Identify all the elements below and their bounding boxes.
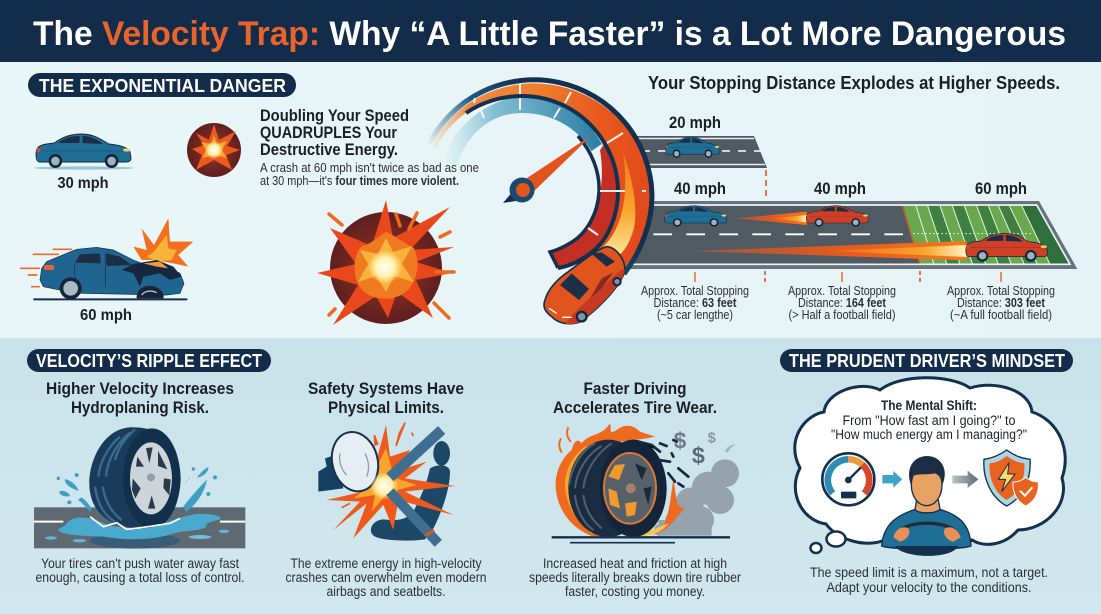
label: 30 mph: 30 mph [58, 175, 108, 192]
speedometer graphic [428, 80, 652, 324]
car: red 40 mph [806, 206, 868, 227]
heading: hydroplaning [46, 380, 234, 417]
text: safety body [286, 556, 486, 599]
text: the mental shift: From "How fast am I going?" to [842, 413, 1016, 428]
heading: safety systems: Physical Limits. [328, 399, 444, 417]
text: hydroplaning body: Your tires can't push water away fast [41, 556, 239, 571]
icon: burning tire with smoke: $ [708, 431, 716, 447]
gauge ticks [474, 84, 646, 235]
heading: doubling your speed [260, 106, 409, 159]
caption: 303 feet [947, 283, 1055, 322]
gauge outer navy arc [428, 80, 652, 274]
label: 60 mph: 60 mph [975, 180, 1027, 198]
section heading pill: VELOCITY’S RIPPLE EFFECT [36, 351, 262, 371]
icon: energy shield [984, 450, 1038, 506]
text: speed limit advice: The speed limit is a maximum, not a target. [810, 564, 1048, 580]
text: hydroplaning body [36, 556, 244, 585]
caption: 164 feet: Distance: 164 feet [798, 295, 887, 310]
gauge inner red band [550, 142, 618, 268]
section heading pill: THE PRUDENT DRIVER’S MINDSET [789, 351, 1065, 371]
caption: 164 feet [788, 283, 896, 322]
icon: tire in water [34, 427, 245, 549]
road: long with football field [630, 201, 1077, 269]
text: the mental shift [831, 398, 1027, 442]
arrow: driver to shield [952, 471, 978, 488]
icon: large explosion [317, 200, 454, 325]
label: 60 mph: 60 mph [80, 307, 132, 324]
heading: hydroplaning: Higher Velocity Increases [46, 380, 234, 398]
gauge blue band [442, 96, 603, 166]
text: tire wear body [529, 556, 741, 599]
title text: The Velocity Trap: Why “A Little Faster” is a Lot More Dangerous [33, 15, 1066, 53]
needle [503, 135, 592, 203]
text: speed limit advice: Adapt your velocity to the conditions. [826, 579, 1032, 595]
heading: stopping distance explodes: Your Stopping Distance Explodes at Higher Speeds. [648, 73, 1060, 93]
heading: doubling your speed: Destructive Energy. [260, 140, 398, 159]
heading: tire wear: Faster Driving [584, 380, 686, 398]
text: crash comparison [260, 160, 479, 188]
dashed markers [765, 271, 920, 283]
brake flame: long [690, 241, 967, 260]
text: crash comparison: at 30 mph—it's four times more violent. [260, 173, 459, 188]
page background: upper section [0, 0, 1101, 340]
text: tire wear body: faster, costing you money. [565, 584, 705, 599]
section heading pill: THE EXPONENTIAL DANGER [39, 76, 286, 96]
thought bubbles [810, 532, 846, 553]
heading: hydroplaning: Hydroplaning Risk. [71, 399, 209, 417]
gauge inner edge [550, 136, 599, 268]
icon: blue car at 30 mph [34, 134, 134, 170]
icon: gauge, driver, arrows and shield [822, 450, 1038, 556]
text: speed limit advice [810, 564, 1048, 595]
caption: 164 feet: Approx. Total Stopping [788, 283, 896, 298]
caption: 303 feet: Distance: 303 feet [957, 295, 1046, 310]
panel: velocity's ripple effect [27, 349, 741, 599]
caption: 63 feet [641, 283, 749, 322]
label: 20 mph: 20 mph [669, 114, 721, 132]
brake flame: short [735, 212, 807, 225]
car: red 60 mph [966, 233, 1047, 262]
tick markers [695, 272, 1001, 282]
gauge dividers [466, 96, 618, 268]
text: the mental shift: "How much energy am I managing?" [831, 427, 1027, 442]
car: blue 40 mph [665, 206, 727, 227]
heading: doubling your speed: QUADRUPLES Your [260, 123, 397, 142]
thought cloud [795, 378, 1065, 549]
caption: 63 feet: Distance: 63 feet [654, 295, 737, 310]
heading: safety systems [308, 380, 464, 417]
icon: airbag and seatbelt [318, 423, 455, 543]
icon: red car three-quarter view [544, 247, 625, 324]
icon: burning tire with smoke [552, 423, 739, 543]
text: safety body: The extreme energy in high-velocity [290, 556, 482, 571]
label: 40 mph second: 40 mph [814, 180, 866, 198]
icon: gauge [822, 453, 874, 505]
arrow: gauge to driver [882, 471, 902, 488]
gauge orange red band [430, 83, 652, 272]
text: crash comparison: A crash at 60 mph isn't twice as bad as one [260, 160, 479, 175]
text: tire wear body: Increased heat and friction at high [543, 556, 727, 571]
caption: 164 feet: (> Half a football field) [788, 307, 896, 322]
page background: lower section [0, 338, 1101, 614]
caption: 63 feet: (~5 car lengthe) [657, 307, 733, 322]
icon: small explosion [187, 123, 241, 177]
divider: reaction distance marker [765, 170, 767, 197]
icon: crashed blue car at 60 mph [21, 218, 193, 299]
text: safety body: airbags and seatbelts. [326, 584, 446, 599]
text: tire wear body: speeds literally breaks down tire rubber [529, 570, 741, 585]
flame trail [602, 152, 635, 258]
text: safety body: crashes can overwhelm even modern [286, 570, 486, 585]
caption: 63 feet: Approx. Total Stopping [641, 283, 749, 298]
text: hydroplaning body: enough, causing a total loss of control. [36, 570, 244, 585]
heading: safety systems: Safety Systems Have [308, 380, 464, 398]
panel: the prudent driver's mindset [780, 349, 1073, 595]
label: 40 mph first: 40 mph [674, 180, 726, 198]
icon: driver [882, 456, 971, 556]
caption: 303 feet: (~A full football field) [950, 307, 1052, 322]
panel: stopping distance [630, 73, 1077, 322]
road: 20 mph [630, 136, 767, 168]
heading: tire wear: Accelerates Tire Wear. [553, 399, 717, 417]
icon: burning tire with smoke: $ [692, 442, 705, 468]
heading: doubling your speed: Doubling Your Speed [260, 106, 409, 125]
icon: burning tire with smoke: $ [674, 428, 687, 454]
text: the mental shift: The Mental Shift: [881, 398, 977, 413]
title banner [0, 0, 1101, 62]
caption: 303 feet: Approx. Total Stopping [947, 283, 1055, 298]
heading: tire wear [553, 380, 717, 417]
panel: the exponential danger [21, 73, 479, 325]
